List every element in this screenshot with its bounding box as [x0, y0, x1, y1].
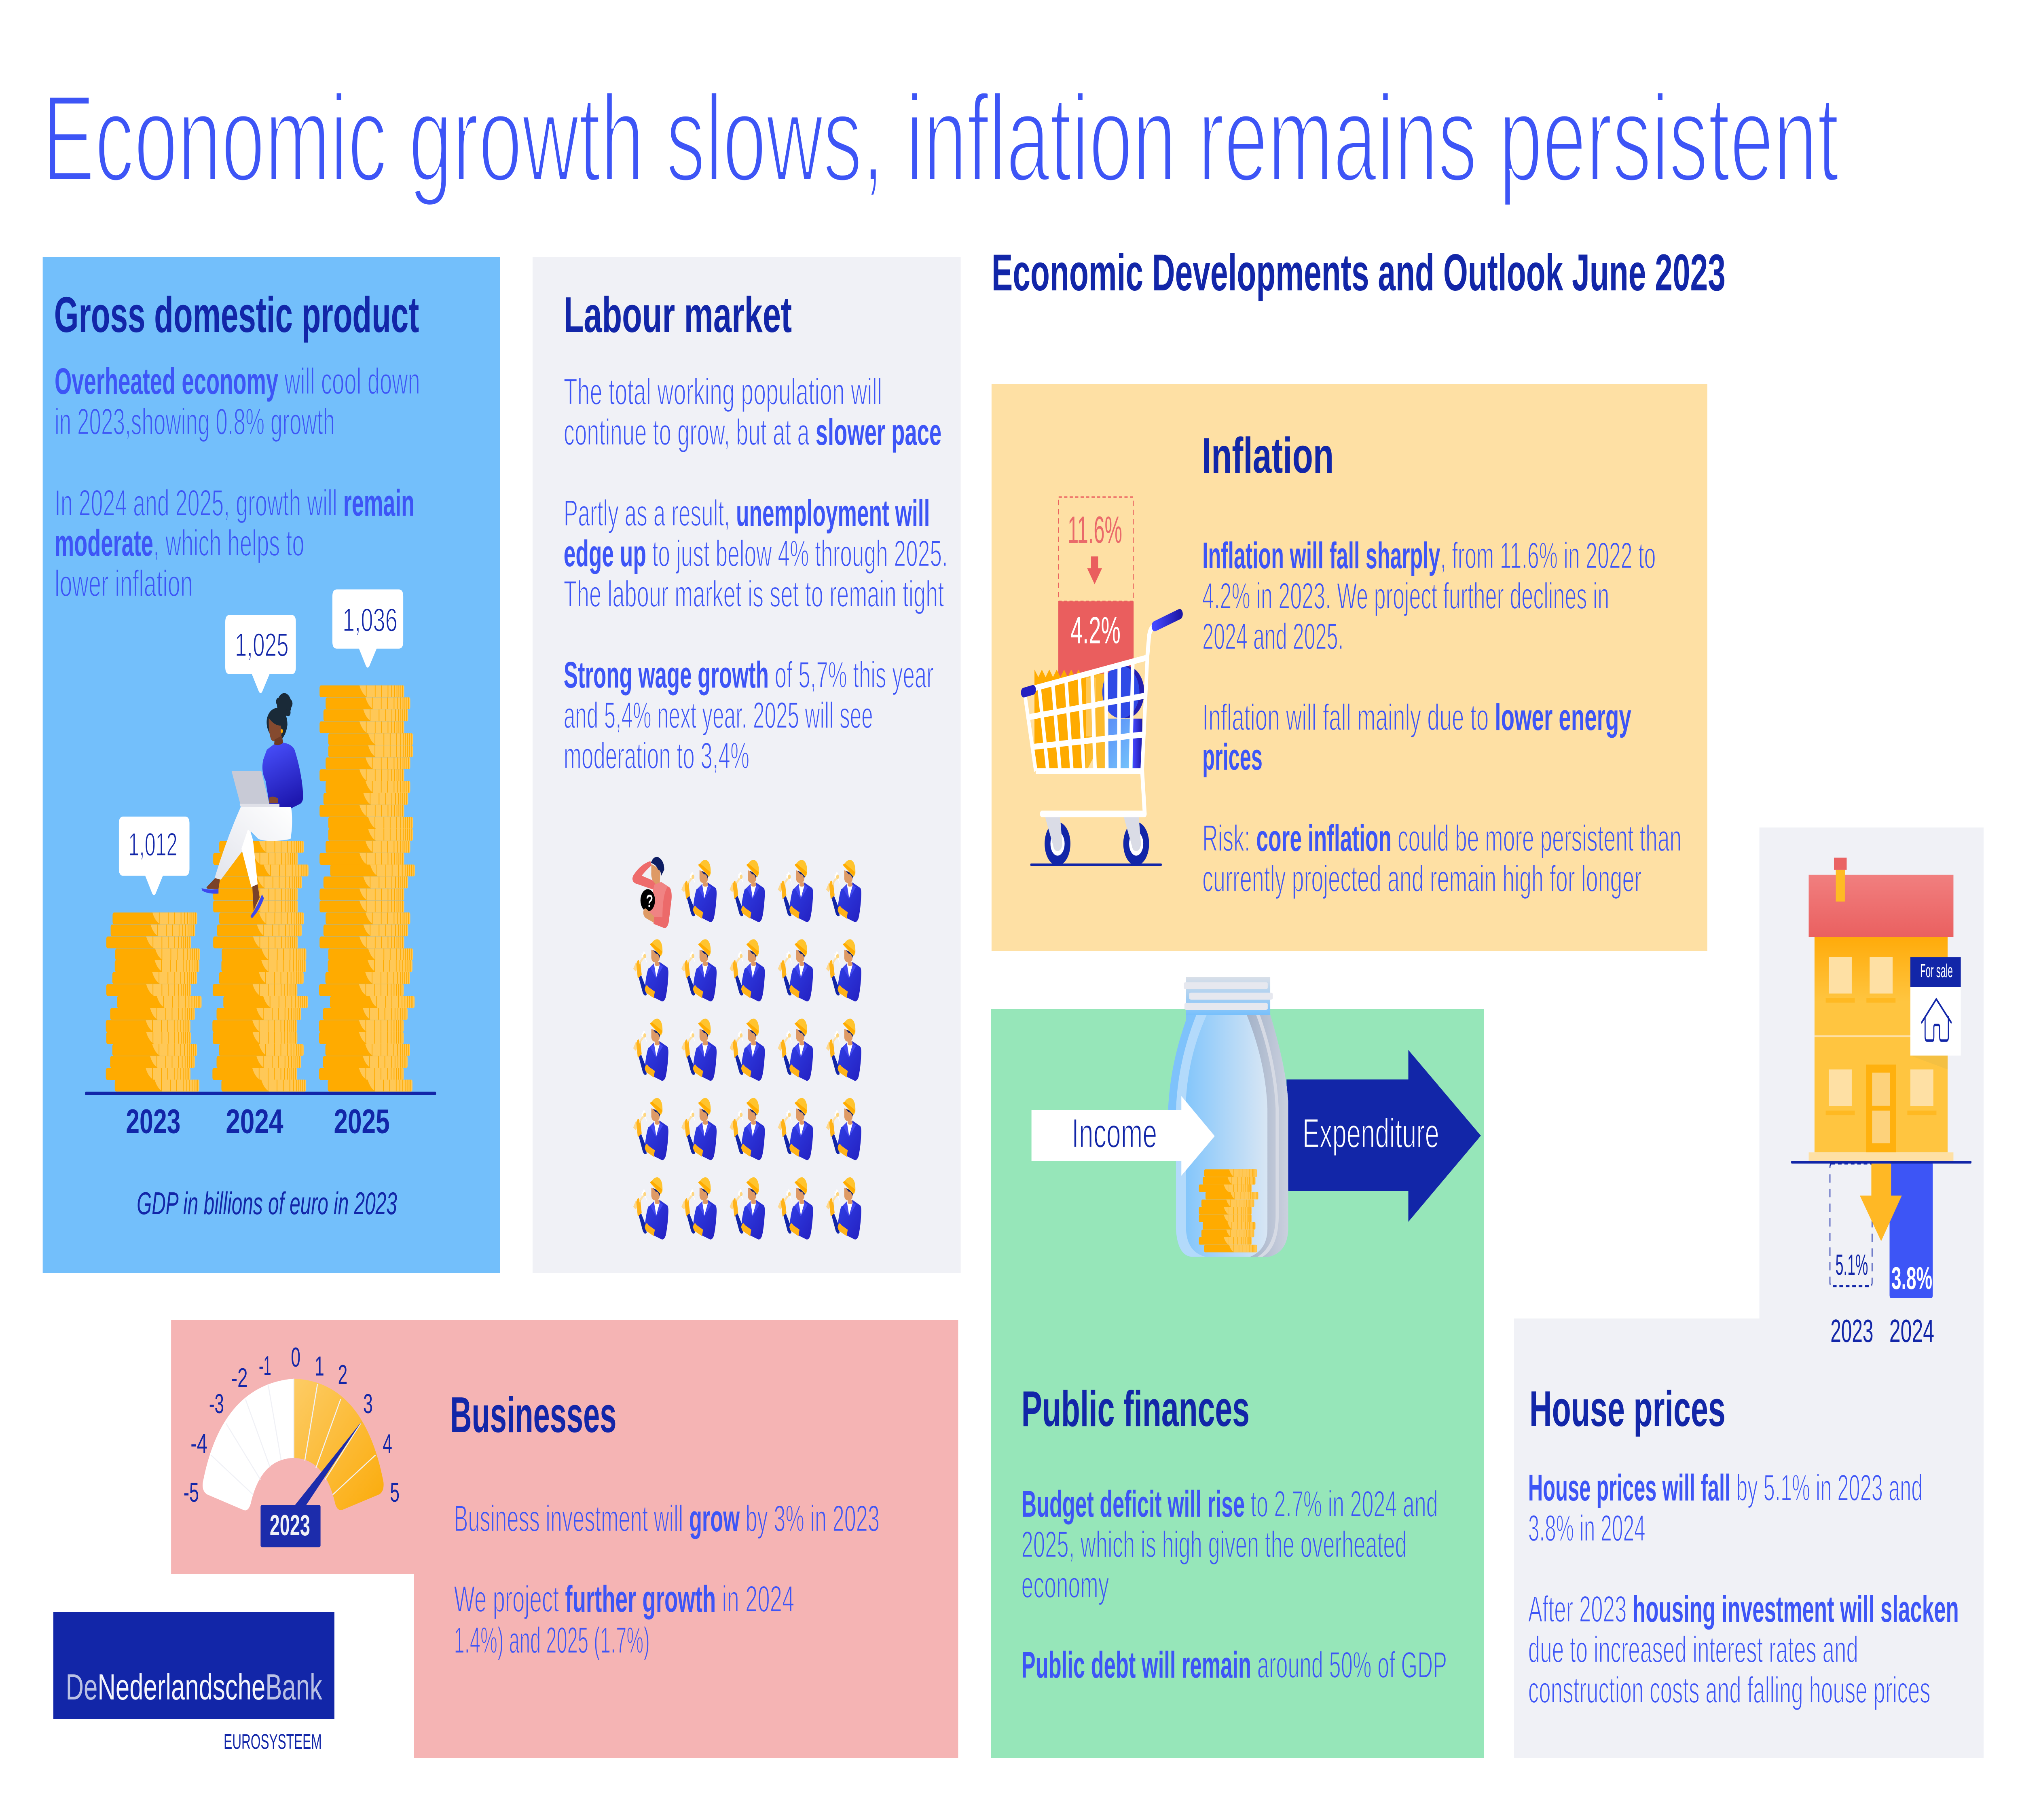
arrow: expenditure	[1286, 1050, 1481, 1222]
icon: house for sale with price bars	[1791, 858, 1971, 1349]
text block: labour summary: continue to grow, but at a slower pace	[564, 412, 941, 453]
callout 1,036	[332, 589, 403, 668]
bar 4.2%: 4.2%	[1070, 609, 1121, 652]
heading: public finances: Public finances	[1022, 1380, 1250, 1437]
gauge scale labels: 5	[390, 1477, 400, 1508]
heading: businesses: Businesses	[450, 1386, 616, 1443]
icon: shopping cart with inflation figures	[1024, 497, 1180, 866]
text block: inflation summary: Inflation will fall mainly due to lower energy	[1202, 697, 1631, 738]
bar 4.2%	[1058, 601, 1134, 677]
icon: confused unemployed person: ?	[646, 891, 653, 911]
text block: inflation summary: prices	[1202, 736, 1263, 778]
text block: GDP summary: in 2023,showing 0.8% growth	[55, 401, 335, 442]
text block: inflation summary: Inflation will fall sharply, from 11.6% in 2022 to	[1202, 535, 1656, 576]
text block: house prices summary: 3.8% in 2024	[1528, 1508, 1646, 1549]
text block: GDP summary: Overheated economy will cool down	[55, 361, 420, 402]
gauge scale labels: 4	[383, 1429, 392, 1460]
gauge scale labels: 3	[363, 1389, 373, 1420]
text block: GDP summary: moderate, which helps to	[55, 523, 305, 564]
text block: businesses summary: 1.4%) and 2025 (1.7%)	[454, 1620, 650, 1661]
gauge scale labels: -5	[184, 1477, 199, 1508]
text block: labour summary: moderation to 3,4%	[564, 735, 749, 777]
dashed box 11.6%: 11.6%	[1068, 509, 1122, 551]
text block: public finances summary: economy	[1022, 1564, 1109, 1606]
callout 1,025: 1,025	[235, 627, 289, 663]
label: 5.1%: 5.1%	[1836, 1249, 1868, 1281]
title: Economic growth slows, inflation remains persistent	[42, 69, 1839, 207]
coin stack 2024	[212, 841, 309, 1092]
subtitle: Economic Developments and Outlook June 2023	[992, 243, 1726, 302]
gauge label 2023: 2023	[270, 1509, 310, 1542]
arrow: expenditure: Expenditure	[1303, 1111, 1439, 1157]
panel: businesses	[171, 1320, 958, 1758]
coins in bottle	[1199, 1169, 1258, 1252]
axis label 2025: 2025	[334, 1102, 390, 1141]
text block: inflation summary: 4.2% in 2023. We project further declines in	[1202, 576, 1609, 617]
heading: inflation: Inflation	[1202, 427, 1334, 483]
arrow: income	[1032, 1096, 1215, 1176]
logo: De Nederlandsche Bank	[53, 1612, 334, 1754]
text block: inflation summary: Risk: core inflation could be more persistent than	[1202, 818, 1681, 859]
text block: inflation summary: 2024 and 2025.	[1202, 616, 1344, 657]
icon: confused unemployed person	[632, 857, 672, 928]
panel: public finances	[991, 977, 1484, 1758]
text block: public finances summary	[1022, 1484, 1447, 1686]
text block: GDP summary: lower inflation	[55, 563, 193, 604]
gauge scale labels: 0	[291, 1342, 300, 1373]
icon: glass bottle with coins	[1168, 977, 1288, 1257]
logo: De Nederlandsche Bank: DeNederlandsche Bank	[66, 1666, 322, 1707]
callout 1,025	[225, 615, 296, 693]
heading: gross domestic product: Gross domestic product	[54, 286, 419, 343]
callout 1,012	[119, 817, 190, 895]
panel: gross domestic product	[43, 257, 500, 1273]
gauge scale labels: -2	[231, 1363, 247, 1394]
axis label 2023: 2023	[126, 1102, 180, 1141]
callout 1,036: 1,036	[343, 602, 398, 639]
logo tagline: EUROSYSTEEM	[224, 1730, 322, 1754]
text block: inflation summary	[1202, 535, 1681, 899]
label: for sale: For sale	[1920, 961, 1953, 982]
coin stack 2025	[319, 686, 415, 1092]
chart: GDP coin stacks	[85, 589, 436, 1141]
text block: businesses summary: Business investment will grow by 3% in 2023	[454, 1498, 880, 1539]
text block: labour summary: edge up to just below 4% through 2025.	[564, 533, 948, 574]
text block: labour summary: and 5,4% next year. 2025 will see	[564, 695, 873, 736]
panel: labour market	[533, 257, 961, 1273]
text block: public finances summary: 2025, which is high given the overheated	[1022, 1524, 1407, 1565]
gauge scale labels: -4	[190, 1428, 207, 1459]
gauge scale labels: 2	[338, 1360, 347, 1390]
dashed box 11.6%	[1059, 497, 1133, 601]
text block: labour summary: The total working population will	[564, 371, 882, 413]
text block: labour summary	[564, 371, 948, 777]
text block: house prices summary: After 2023 housing investment will slacken	[1528, 1589, 1959, 1630]
coin stack 2023	[106, 912, 201, 1092]
text block: public finances summary: Public debt will remain around 50% of GDP	[1022, 1644, 1447, 1686]
gauge scale labels: 1	[315, 1351, 324, 1382]
text block: GDP summary	[55, 361, 420, 604]
arrow: income: Income	[1072, 1111, 1157, 1157]
text block: labour summary: Strong wage growth of 5,7% this year	[564, 654, 934, 696]
callout 1,012: 1,012	[128, 827, 178, 863]
panel: inflation	[992, 384, 1707, 951]
caption: GDP unit: GDP in billions of euro in 2023	[137, 1185, 397, 1221]
text block: businesses summary: We project further growth in 2024	[454, 1579, 794, 1620]
text block: labour summary: Partly as a result, unemployment will	[564, 493, 930, 534]
label: 3.8%: 3.8%	[1891, 1260, 1932, 1296]
text block: house prices summary: House prices will fall by 5.1% in 2023 and	[1528, 1467, 1923, 1509]
text block: house prices summary	[1528, 1467, 1959, 1711]
axis label 2024: 2024	[226, 1102, 283, 1141]
label: 2023: 2023	[1830, 1313, 1874, 1349]
panel: house prices	[1514, 827, 1984, 1758]
text block: businesses summary	[454, 1498, 880, 1661]
figure: woman with laptop on coins	[201, 693, 303, 918]
text block: labour summary: The labour market is set to remain tight	[564, 574, 944, 615]
heading: house prices: House prices	[1529, 1380, 1726, 1437]
heading: labour market: Labour market	[564, 286, 792, 343]
gauge scale labels	[184, 1342, 400, 1508]
icons: employed workers	[633, 860, 861, 1240]
label: 2024: 2024	[1889, 1313, 1934, 1349]
gauge scale labels: -1	[259, 1351, 271, 1382]
chart: investment gauge	[184, 1342, 400, 1547]
text block: inflation summary: currently projected and remain high for longer	[1202, 858, 1641, 899]
text block: house prices summary: due to increased interest rates and	[1528, 1629, 1858, 1670]
text block: GDP summary: In 2024 and 2025, growth will remain	[55, 483, 415, 524]
gauge scale labels: -3	[209, 1389, 224, 1420]
text block: house prices summary: construction costs and falling house prices	[1528, 1670, 1931, 1711]
pictogram: workers grid	[632, 857, 861, 1240]
text block: public finances summary: Budget deficit will rise to 2.7% in 2024 and	[1022, 1484, 1438, 1525]
